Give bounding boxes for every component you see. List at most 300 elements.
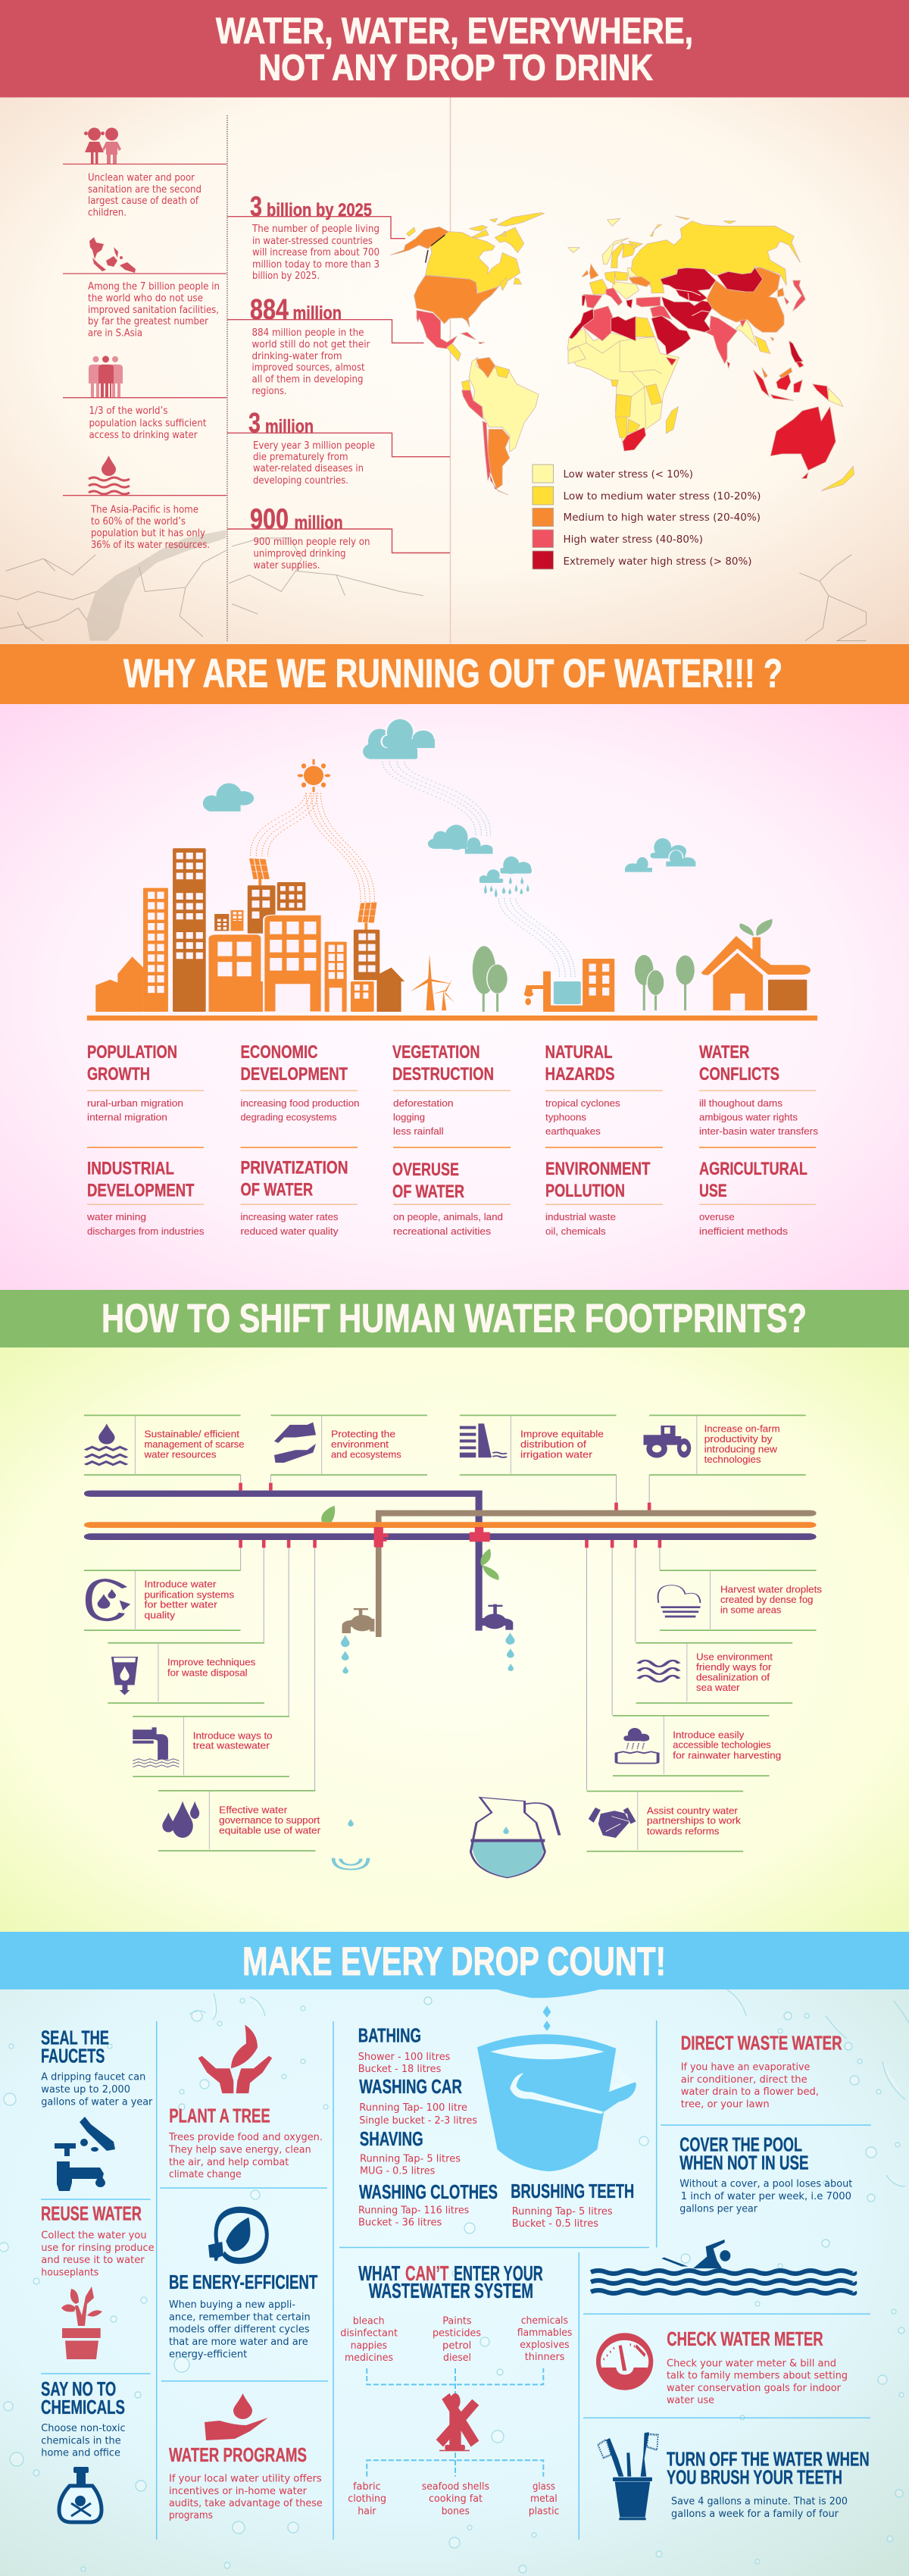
tip: be energy efficient: When buying a new appli- [169,2299,295,2311]
chart legend: water stress: Medium to high water stress (20-40%) [564,512,761,524]
icon: water jug [470,1798,560,1878]
text: cause of death [88,173,201,218]
stat: 3 million: die prematurely from [253,452,348,463]
header: make every drop count: MAKE EVERY DROP COUNT! [242,1939,666,1984]
cause: natural hazards: earthquakes [545,1125,601,1137]
panel: tips column two [168,2025,323,2521]
icon: toothbrushes in cup [598,2432,658,2520]
action: rainwater harvesting: Introduce easily [673,1729,745,1740]
cause: industrial development [86,1158,205,1237]
stat: 3 billion: The number of people living [251,224,380,235]
text: one third of population [89,405,206,441]
cause: privatization of water: PRIVATIZATION [241,1158,348,1178]
action: harvest fog: created by dense fog [720,1594,813,1605]
cause: overuse of water: recreational activities [393,1225,492,1237]
tip: plant a tree: They help save energy, clean [168,2144,311,2156]
cause: population growth: POPULATION [87,1042,177,1063]
header: water water everywhere: WATER, WATER, EVERYWHERE, [216,11,693,52]
section: why running out of water [0,704,909,1290]
tip: say no to chemicals [41,2377,126,2522]
action: treat wastewater [133,1716,289,1777]
stat: 884 million: 884 million people in the [251,327,364,339]
action: water governance: governance to support [219,1814,320,1826]
action: rainwater harvesting [613,1715,781,1776]
text: one third of population: population lacks sufficient [89,418,206,429]
chart legend: water stress [533,465,761,569]
cause: natural hazards [545,1042,620,1137]
cause: water conflicts: WATER [699,1042,750,1063]
tip: seal the faucets [41,2026,153,2191]
action: protecting environment [270,1415,427,1476]
section: make every drop count [0,1989,909,2576]
action: waste disposal [108,1642,264,1704]
text: one third of population: 1/3 of the world’s [89,405,168,417]
cause: vegetation destruction: logging [393,1112,425,1123]
stat: 900 million: 900 million people rely on [253,537,370,548]
text: cause of death: sanitation are the second [88,184,201,196]
heading: wastewater: CAN’T [405,2261,448,2285]
list: household chemicals: disinfectant [340,2327,398,2340]
text: 7 billion people: by far the greatest number [88,316,209,327]
panel: causes grid [86,1042,819,1237]
list: solids [348,2481,386,2518]
list: paints and fuels: Paints [442,2315,472,2327]
header: water water everywhere: NOT ANY DROP TO DRINK [259,49,653,88]
tip: be energy efficient [169,2210,317,2360]
action: sustainable management: Sustainable/ efficient [144,1428,239,1439]
stat: 3 billion: billion by 2025. [252,271,320,282]
chart legend: water stress: Low to medium water stress (10-20%) [564,490,761,502]
list: paints and fuels: diesel [443,2352,471,2364]
stat: 3 million: million [265,417,314,437]
stat: 884 million [250,294,370,397]
cause: overuse of water: on people, animals, land [393,1211,503,1222]
cause: water conflicts: ill thoughout dams [699,1097,783,1109]
cause: environment pollution [545,1159,651,1237]
cause: agricultural use: overuse [699,1211,735,1222]
cause: population growth: rural-urban migration [87,1097,183,1109]
list: flammables: explosives [520,2339,570,2351]
tip: cover the pool: gallons per year [679,2202,758,2214]
tip: plant a tree [168,2025,323,2180]
usage: shaving: Running Tap- 5 litres [360,2152,461,2164]
list: flammables [517,2315,572,2363]
cause: environment pollution: POLLUTION [545,1181,625,1201]
list: household chemicals: medicines [345,2352,393,2364]
text: cause of death: Unclean water and poor [88,173,195,183]
cause: privatization of water: increasing water rates [241,1211,339,1222]
tip: check water meter: Check your water meter & bill and [667,2357,836,2369]
text: 7 billion people: the world who do not use [88,293,203,305]
list: food waste: bones [442,2506,470,2518]
cause: agricultural use: AGRICULTURAL [699,1159,807,1179]
list: paints and fuels: pesticides [433,2327,481,2340]
tip: check water meter: water use [667,2394,714,2406]
panel: lower right footprint actions [586,1570,823,1852]
list: solids: hair [358,2506,376,2518]
action: irrigation water: irrigation water [520,1448,593,1460]
usage: washing car [359,2075,477,2127]
cause: overuse of water [392,1160,503,1237]
panel: key statistics [227,191,450,571]
icon: rain drops [484,877,529,897]
stat: 900 million [250,503,370,571]
action: protecting environment: environment [331,1438,389,1450]
tip: plant a tree: climate change [169,2168,242,2180]
stat: 3 billion: will increase from about 700 [252,247,380,258]
cause: agricultural use [699,1159,807,1237]
stat: 884 million: all of them in developing [251,374,364,385]
tip: direct waste water: If you have an evaporative [681,2061,810,2074]
action: desalinization: desalinization of [696,1672,770,1683]
panel: what cannot enter wastewater [340,2261,572,2518]
usage: bathing [358,2024,450,2075]
icon: ripple [333,1858,368,1870]
chart legend: water stress: High water stress (40-80%) [564,534,703,546]
text: cause of death: largest cause of death of [88,196,198,207]
cause: vegetation destruction [392,1042,494,1137]
list: hard materials [529,2481,559,2518]
list: hard materials: metal [530,2493,558,2505]
action: desalinization [636,1642,792,1704]
text: 7 billion people [88,281,220,340]
text: cause of death: children. [88,208,127,218]
list: paints and fuels [433,2315,481,2364]
icon: south asia map [89,237,136,273]
chart legend: water stress: Extremely water high stress (> 80%) [564,556,751,568]
tip: say no to chemicals: home and office [41,2446,120,2459]
heading: wastewater: ENTER YOUR [454,2261,543,2285]
cause: privatization of water [241,1158,348,1237]
tip: seal the faucets: waste up to 2,000 [41,2083,130,2096]
text: 7 billion people: Among the 7 billion people in [88,281,220,293]
action: protecting environment: Protecting the [331,1428,395,1439]
stat: 884 million: improved sources, almost [251,362,365,374]
list: hard materials: glass [533,2481,555,2493]
action: sustainable management [84,1415,244,1476]
tip: seal the faucets: SEAL THE [41,2026,109,2049]
cause: industrial development: water mining [86,1211,146,1222]
tip: turn off the water: gallons a week for a family of four [671,2508,839,2520]
tip: seal the faucets: A dripping faucet can [41,2071,145,2083]
cause: agricultural use: USE [699,1181,727,1201]
stat: 3 billion [250,191,380,282]
action: farm productivity [643,1415,806,1476]
icon: hand with drop [205,2393,268,2440]
tip: water programs [169,2393,323,2521]
panel: tips column four [591,2031,870,2520]
cause: natural hazards: typhoons [545,1112,587,1123]
tip: cover the pool [591,2133,854,2293]
text: asia pacific: The Asia-Pacific is home [90,505,198,515]
tip: reuse water: and reuse it to water [41,2254,145,2266]
cause: vegetation destruction: VEGETATION [392,1042,480,1063]
panel: tips column one [41,2026,155,2522]
tip: water programs: programs [169,2509,213,2521]
tip: be energy efficient: energy-efficient [169,2348,247,2360]
cause: privatization of water: reduced water quality [241,1225,339,1237]
action: farm productivity: Increase on-farm [704,1423,780,1435]
cause: natural hazards: tropical cyclones [545,1097,620,1109]
action: harvest fog: Harvest water droplets [720,1584,823,1595]
tip: seal the faucets: gallons of water a year [41,2096,153,2108]
action: water partnerships [586,1791,743,1852]
usage: washing car: Single bucket - 2-3 litres [359,2114,477,2127]
cause: economic development: increasing food production [241,1097,359,1109]
usage: brushing teeth: Running Tap- 5 litres [512,2205,613,2218]
icon: person crossed out [436,2393,479,2451]
usage: washing clothes: WASHING CLOTHES [359,2180,498,2203]
stat: 3 billion: in water-stressed countries [252,236,373,247]
tip: say no to chemicals: CHEMICALS [41,2396,125,2418]
cause: economic development [241,1042,359,1123]
action: sustainable management: water resources [143,1448,217,1460]
tip: reuse water: REUSE WATER [41,2202,142,2225]
cause: economic development: DEVELOPMENT [241,1064,348,1085]
action: water governance: Effective water [219,1804,288,1815]
action: irrigation water: Improve equitable [520,1428,604,1439]
action: farm productivity: introducing new [704,1444,778,1455]
action: water partnerships: Assist country water [647,1804,739,1816]
list: household chemicals [340,2315,398,2364]
panel: lower left footprint actions [84,1570,321,1851]
tip: reuse water: houseplants [41,2266,98,2278]
usage: washing clothes [358,2180,498,2229]
stat: 3 million [248,408,375,487]
usage: shaving: MUG - 0.5 litres [360,2165,435,2177]
action: harvest fog [658,1570,823,1631]
action: farm productivity: technologies [704,1454,761,1465]
action: desalinization: sea water [696,1682,740,1693]
text: 7 billion people: improved sanitation facilities, [88,305,219,316]
tip: cover the pool: WHEN NOT IN USE [679,2151,809,2174]
tip: reuse water: use for rinsing produce [41,2242,155,2254]
list: flammables: thinners [525,2351,564,2363]
action: farm productivity: productivity by [704,1433,773,1445]
cause: overuse of water: OVERUSE [392,1160,459,1180]
section: human water footprints [0,1347,909,1932]
cause: environment pollution: oil, chemicals [545,1225,606,1237]
action: rainwater harvesting: for rainwater harvesting [673,1749,781,1761]
stat: 884 million: world still do not get their [251,340,370,350]
tip: reuse water: Collect the water you [41,2230,147,2242]
cause: population growth: GROWTH [87,1064,150,1085]
usage: shaving: SHAVING [360,2127,423,2150]
list: flammables: flammables [517,2327,572,2339]
action: water partnerships: towards reforms [647,1825,720,1836]
cause: population growth: internal migration [87,1112,167,1123]
panel: litres used per activity [358,2005,636,2230]
tip: plant a tree: the air, and help combat [169,2156,289,2168]
action: harvest fog: in some areas [720,1604,782,1616]
usage: brushing teeth: BRUSHING TEETH [511,2180,634,2202]
tip: check water meter: talk to family members about setting [667,2370,848,2382]
tip: say no to chemicals: chemicals in the [41,2435,121,2447]
icon: house [701,919,811,1010]
list: food waste: seafood shells [422,2481,489,2493]
cause: vegetation destruction: less rainfall [393,1125,444,1137]
tip: be energy efficient: that are more water and are [169,2336,308,2348]
action: water partnerships: partnerships to work [647,1815,741,1826]
usage: brushing teeth: Bucket - 0.5 litres [512,2218,598,2230]
icon: bucket with drops [477,2005,636,2171]
usage: brushing teeth [511,2180,634,2230]
stat: 3 million: Every year 3 million people [253,440,375,452]
tip: check water meter [598,2327,848,2406]
cause: natural hazards: NATURAL [545,1042,612,1063]
cause: water conflicts: CONFLICTS [699,1064,779,1085]
cause: overuse of water: OF WATER [392,1182,464,1202]
action: irrigation water [460,1415,617,1476]
tip: water programs: incentives or in-home water [169,2485,307,2497]
icon: taps and falling drops [341,1604,515,1826]
action: purification: purification systems [144,1588,235,1600]
action: treat wastewater: treat wastewater [193,1740,270,1751]
stat: 3 billion: 3 [250,191,262,222]
text: asia pacific: population but it has only [91,527,205,540]
icon: solar panels [249,859,376,930]
list: food waste [422,2481,489,2518]
cause: water conflicts: inter-basin water transfers [699,1125,819,1137]
heading: wastewater: WHAT [358,2261,400,2285]
cause: economic development: degrading ecosystems [241,1112,337,1123]
action: water governance [158,1790,321,1851]
usage: bathing: Bucket - 18 litres [358,2063,441,2075]
icon: hands with leaf [198,2025,272,2093]
tip: cover the pool: Without a cover, a pool loses about [679,2177,852,2189]
list: solids: fabric [353,2481,381,2493]
usage: shaving [360,2127,461,2177]
stat: 3 million: water-related diseases in [253,463,364,474]
tip: say no to chemicals: Choose non-toxic [41,2422,126,2434]
list: household chemicals: bleach [353,2315,385,2327]
header: water water everywhere [0,0,909,97]
diagram: pipes network [84,1475,817,1790]
icon: eco plug [208,2210,267,2261]
stat: 900 million: 900 [250,503,289,535]
heading: wastewater: WASTEWATER SYSTEM [369,2279,533,2302]
cause: population growth [87,1042,183,1123]
cause: industrial development: DEVELOPMENT [87,1181,195,1201]
cause: water conflicts: ambigous water rights [699,1112,798,1123]
list: food waste: cooking fat [429,2493,483,2505]
text: asia pacific [90,505,210,551]
text: 7 billion people: are in S.Asia [88,327,142,340]
stat: 884 million: drinking-water from [251,351,342,362]
text: one third of population: access to drinking water [89,430,198,441]
tip: water programs: If your local water utility offers [169,2472,322,2484]
tip: cover the pool: COVER THE POOL [679,2133,802,2155]
usage: washing car: WASHING CAR [359,2075,462,2098]
tip: check water meter: water conservation goals for indoor [667,2382,841,2394]
action: purification: quality [144,1609,176,1620]
illustration: city buildings [95,848,405,1012]
panel: upper footprint actions [84,1415,806,1476]
tip: direct waste water: tree, or your lawn [681,2098,770,2110]
tip: plant a tree: Trees provide food and oxygen. [168,2131,323,2143]
arrows: water flow lines [383,762,575,978]
stat: 3 million: developing countries. [253,475,348,487]
tip: be energy efficient: models offer different cycles [169,2324,310,2336]
icon: clouds [203,718,695,883]
tip: say no to chemicals: SAY NO TO [41,2377,116,2400]
cause: environment pollution: ENVIRONMENT [545,1159,651,1179]
list: paints and fuels: petrol [442,2340,471,2352]
tip: turn off the water [598,2432,870,2520]
tip: water programs: WATER PROGRAMS [169,2443,307,2466]
icon: water meter [598,2337,651,2387]
tip: direct waste water: DIRECT WASTE WATER [681,2031,842,2054]
action: rainwater harvesting: accessible techologies [673,1739,771,1751]
stat: 884 million: 884 [250,294,289,326]
stat: 3 million: 3 [248,408,261,438]
section: water scarcity [0,97,909,644]
icon: poison bottle [59,2467,102,2522]
stat: 3 billion: billion by 2025 [267,200,372,221]
usage: washing clothes: Bucket - 36 litres [358,2217,442,2229]
cause: agricultural use: inefficient methods [699,1225,789,1237]
action: treat wastewater: Introduce ways to [193,1729,273,1741]
list: hard materials: plastic [529,2506,559,2518]
action: protecting environment: and ecosystems [331,1448,401,1460]
usage: bathing: BATHING [358,2024,421,2046]
action: purification: for better water [144,1599,218,1610]
cause: privatization of water: OF WATER [241,1179,313,1200]
action: desalinization: friendly ways for [696,1661,772,1673]
cause: vegetation destruction: DESTRUCTION [392,1064,494,1085]
icon: leaves [321,1506,499,1580]
icon: water tank building [524,959,614,1012]
list: flammables: chemicals [521,2315,568,2327]
cause: environment pollution: industrial waste [545,1211,616,1222]
header: make every drop count [0,1932,909,1998]
cause: industrial development: INDUSTRIAL [87,1158,174,1178]
header: why are we running out [0,644,909,704]
action: waste disposal: for waste disposal [167,1667,248,1678]
tip: water programs: audits, take advantage of these [169,2497,323,2509]
chart legend: water stress: Low water stress (< 10%) [564,468,693,480]
action: sustainable management: management of scarse [144,1438,244,1450]
tip: reuse water [41,2202,155,2359]
cause: natural hazards: HAZARDS [545,1064,615,1085]
tip: be energy efficient: ance, remember that certain [169,2312,311,2324]
icon: wind turbines [411,954,454,1010]
panel: facts column [63,127,226,551]
heading: wastewater [358,2261,543,2302]
header: how to shift footprints [0,1290,909,1347]
icon: faucet and wrench [55,2117,115,2191]
stat: 884 million: million [292,303,342,324]
tip: cover the pool: 1 inch of water per week, i.e 7000 [681,2190,851,2202]
stat: 900 million: water supplies. [253,560,320,571]
usage: washing car: Running Tap- 100 litre [359,2102,467,2114]
tip: direct waste water [681,2031,842,2110]
icon: sun [298,759,330,792]
icon: children [84,127,121,164]
cause: economic development: ECONOMIC [241,1042,318,1063]
tip: direct waste water: water drain to a flower bed, [681,2086,819,2098]
illustration: city and water cycle [87,718,817,1021]
list: solids: clothing [348,2493,386,2505]
cause: industrial development: discharges from industries [87,1225,205,1237]
action: waste disposal: Improve techniques [167,1657,256,1668]
action: desalinization: Use environment [696,1651,773,1663]
stat: 3 billion: million today to more than 3 [252,259,380,271]
action: irrigation water: distribution of [520,1438,586,1450]
stat: 884 million: regions. [251,386,286,397]
text: asia pacific: 36% of its water resources. [91,540,210,551]
tip: plant a tree: PLANT A TREE [169,2105,270,2127]
